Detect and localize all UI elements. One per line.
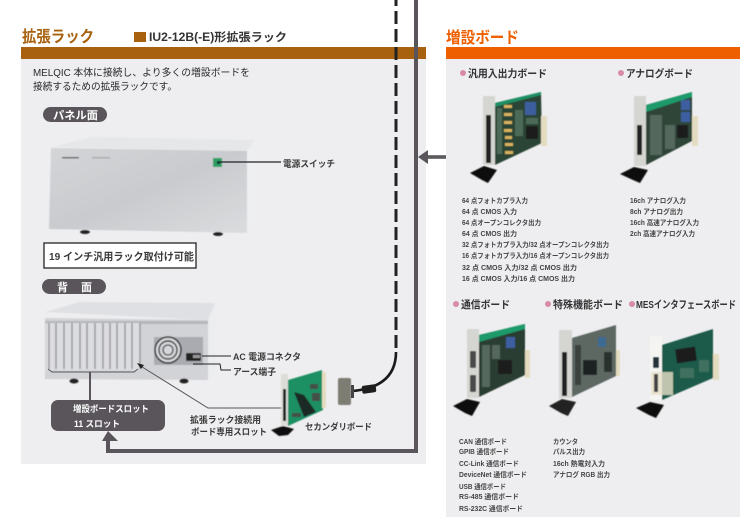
spec list: RS-232C 通信ボード [459, 504, 523, 513]
callout: AC power connector: AC 電源コネクタ [233, 351, 301, 362]
pill: panel side [43, 107, 107, 122]
spec list: USB 通信ボード [459, 482, 506, 491]
spec list [553, 437, 610, 479]
header bar: expansion boards [446, 47, 740, 59]
section: special function board [545, 298, 623, 479]
callout: expansion board slots: 増設ボードスロット [73, 403, 149, 414]
spec list: 64 点フォトカプラ入力 [462, 196, 528, 205]
spec list: 16ch 熱電対入力 [553, 459, 605, 468]
pill: panel side: パネル面 [53, 109, 98, 122]
spec list: 64 点 CMOS 入力 [462, 207, 517, 216]
spec list: 64 点 CMOS 出力 [462, 229, 517, 238]
section: analog board [618, 67, 699, 238]
callout: earth terminal [193, 364, 276, 377]
secondary board [271, 370, 326, 436]
spec list: 32 点フォトカプラ入力/32 点オープンコレクタ出力 [462, 240, 609, 249]
spec list [459, 437, 527, 513]
board photo [470, 92, 547, 183]
spec list: RS-485 通信ボード [459, 492, 519, 501]
intro text [33, 66, 250, 93]
board photo [453, 324, 530, 416]
heading: expansion rack: 拡張ラック [22, 28, 94, 46]
label: dedicated slot [190, 414, 267, 437]
callout: dedicated slot arrow [137, 363, 300, 408]
board photo [636, 329, 719, 418]
header bar: expansion rack [21, 47, 426, 59]
spec list: GPIB 通信ボード [459, 447, 509, 456]
callout: expansion board slots: 11 スロット [74, 419, 120, 429]
model name heading: IU2-12B(-E)形拡張ラック [149, 30, 287, 44]
spec list: DeviceNet 通信ボード [459, 470, 527, 479]
rear view of rack [45, 302, 215, 384]
spec list: CAN 通信ボード [459, 437, 507, 446]
callout: power switch: 電源スイッチ [283, 158, 335, 169]
spec list: 32 点 CMOS 入力/32 点 CMOS 出力 [462, 263, 577, 272]
heading: 特殊機能ボード [553, 298, 623, 311]
heading: アナログボード [626, 67, 693, 80]
heading: 汎用入出力ボード [468, 67, 547, 80]
spec list: 2ch 高速アナログ入力 [630, 229, 695, 238]
pill: rear side [42, 279, 106, 294]
callout: AC power connector [202, 351, 301, 362]
spec list: パルス出力 [553, 447, 585, 456]
spec list: 16ch 高速アナログ入力 [630, 218, 699, 227]
intro text: 接続するための拡張ラックです。 [33, 80, 177, 93]
spec list: 8ch アナログ出力 [630, 207, 683, 216]
connector and cable [338, 352, 396, 405]
dashed connection line [394, 0, 398, 351]
board photo [549, 325, 620, 416]
arrow: to boards [418, 150, 446, 164]
note: 19-inch rack mountable [44, 243, 196, 268]
section: MES interface board [629, 299, 736, 418]
spec list: アナログ RGB 出力 [553, 470, 610, 479]
intro text: MELQIC 本体に接続し、より多くの増設ボードを [33, 66, 250, 79]
spec list: カウンタ [553, 437, 578, 446]
note: 19-inch rack mountable: 19 インチ汎用ラック取付け可能 [49, 250, 194, 263]
label: dedicated slot: 拡張ラック接続用 [190, 414, 261, 425]
spec list: 16 点フォトカプラ入力/16 点オープンコレクタ出力 [462, 251, 609, 260]
spec list [462, 196, 609, 283]
callout: expansion board slots [48, 369, 165, 431]
spec list: 64 点オープンコレクタ出力 [462, 218, 541, 227]
heading: 通信ボード [461, 298, 510, 311]
callout: earth terminal: アース端子 [233, 366, 276, 377]
callout: power switch [220, 158, 335, 169]
label: dedicated slot: ボード専用スロット [191, 426, 267, 437]
panel: expansion rack [21, 47, 426, 464]
panel: expansion boards [446, 47, 740, 517]
section: communication board [453, 298, 530, 513]
spec list: CC-Link 通信ボード [459, 459, 519, 468]
pill: rear side: 背 面 [57, 280, 92, 294]
label: secondary board: セカンダリボード [305, 421, 372, 432]
heading: expansion boards: 増設ボード [446, 28, 519, 47]
spec list: 16ch アナログ入力 [630, 196, 686, 205]
front view of rack [49, 137, 255, 236]
spec list [630, 196, 699, 238]
section: general I/O board [460, 67, 609, 283]
spec list: 16 点 CMOS 入力/16 点 CMOS 出力 [462, 274, 575, 283]
arrow: connection line to slots [102, 0, 416, 451]
board photo [620, 92, 698, 183]
